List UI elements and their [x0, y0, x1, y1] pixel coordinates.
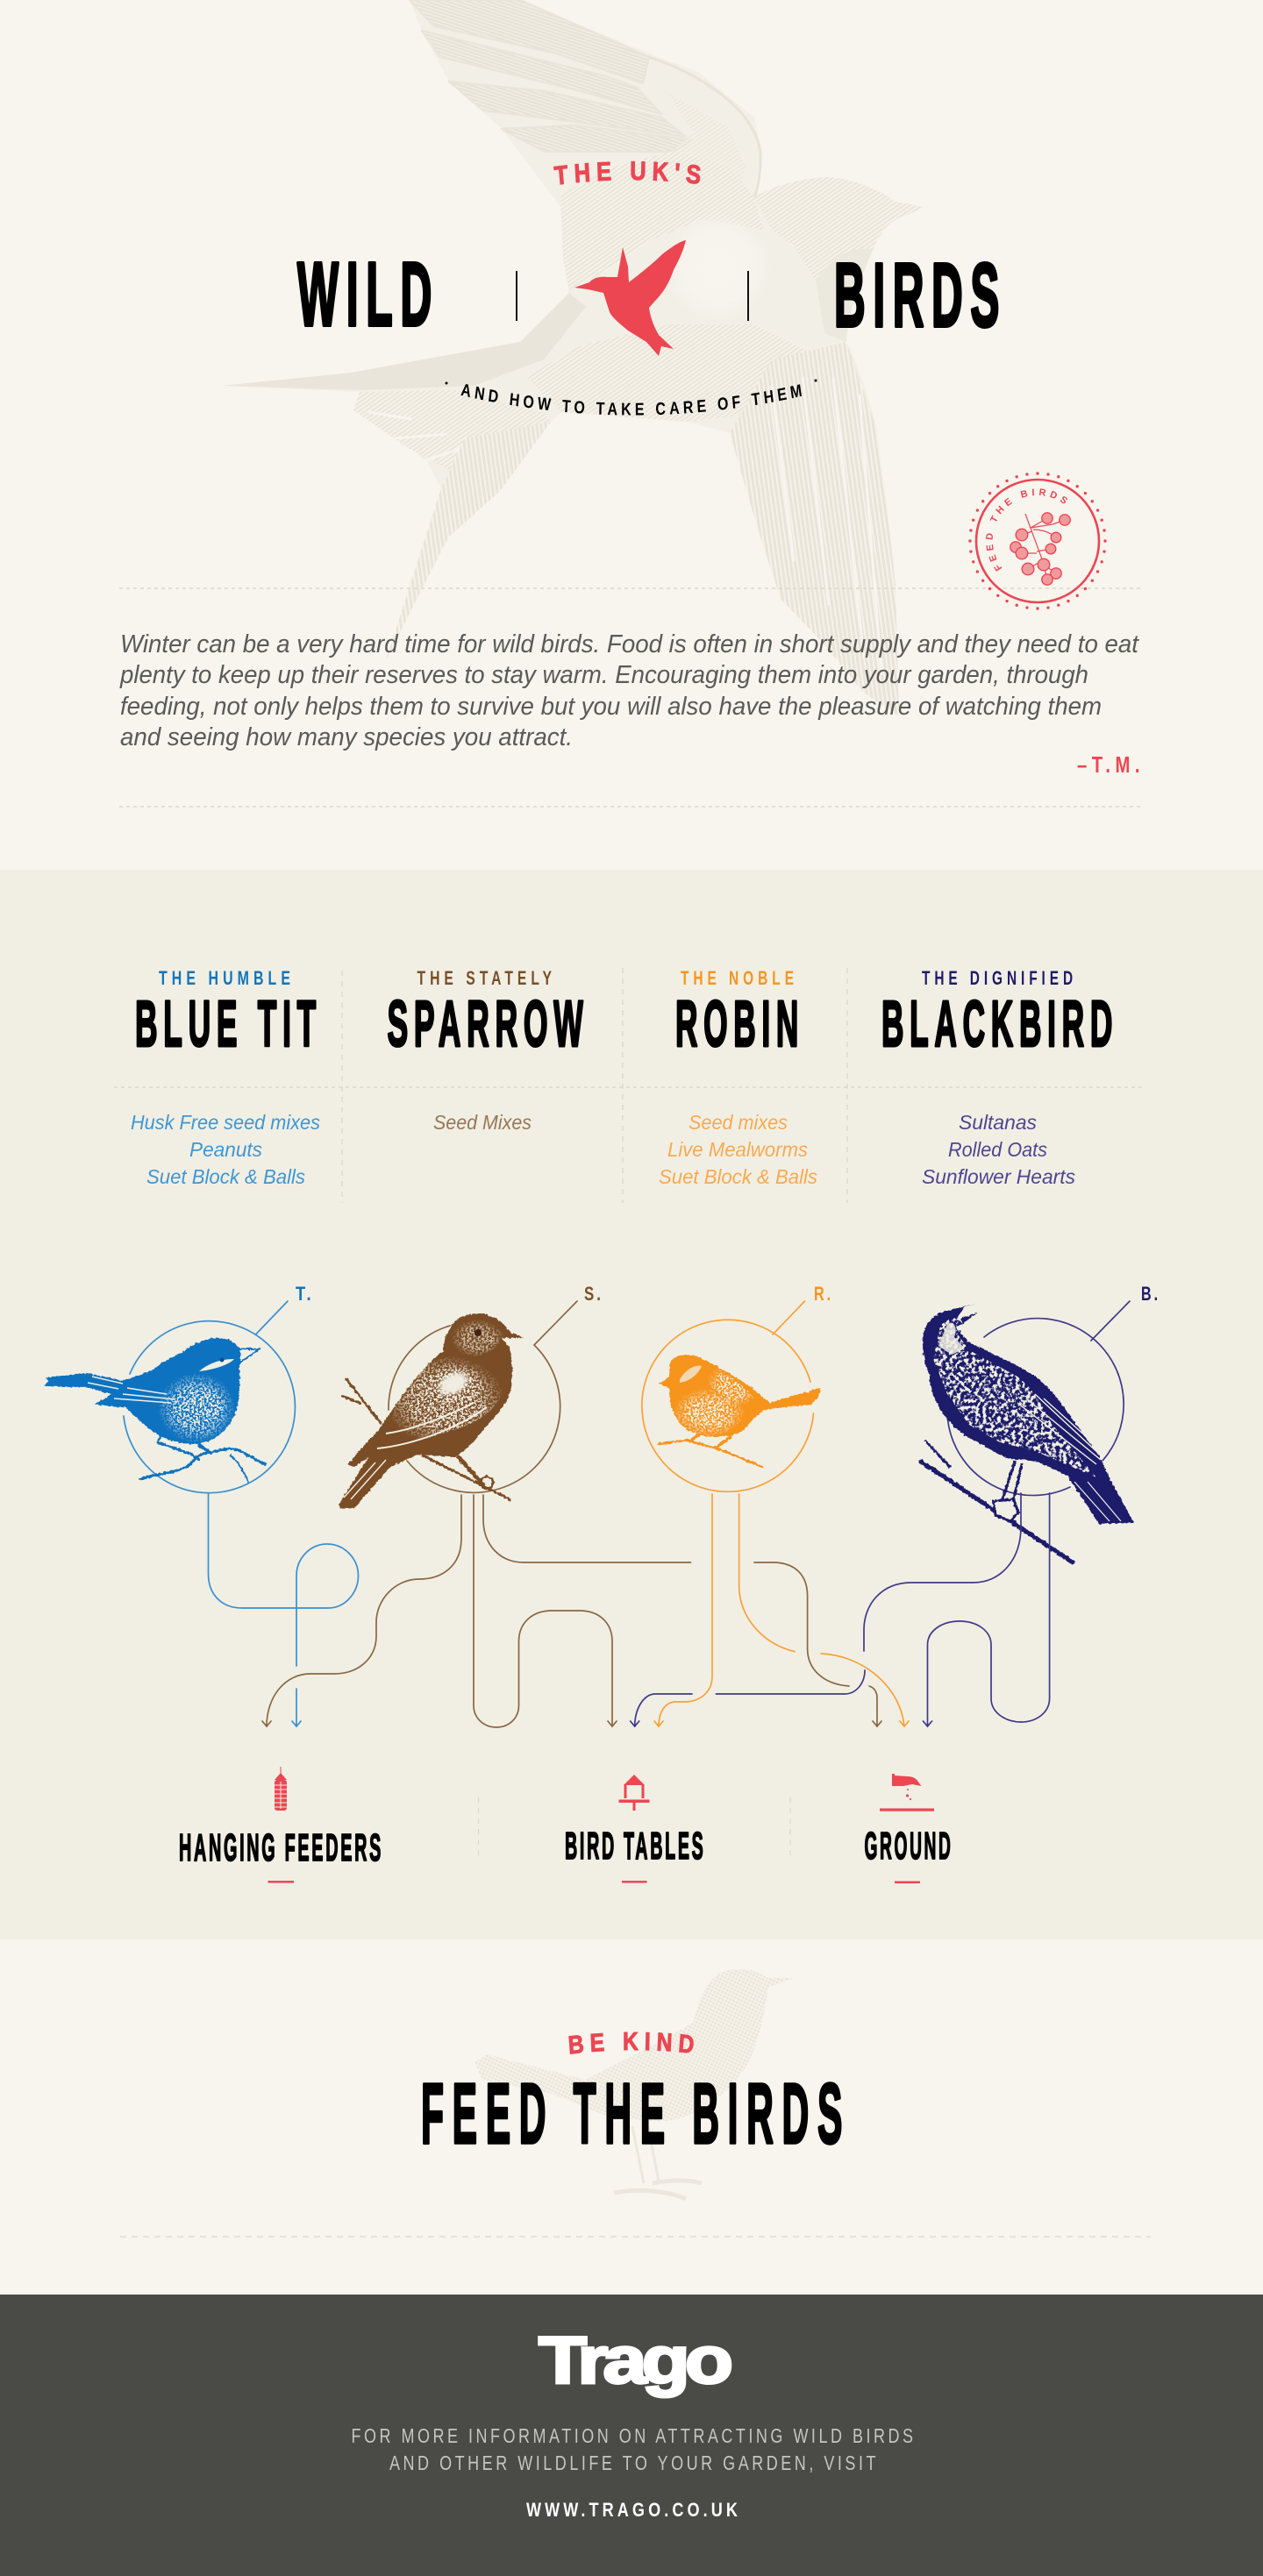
footer text [351, 2424, 916, 2474]
feeding location: ground [865, 1774, 953, 1883]
bird marker: sparrow [389, 1283, 603, 1492]
species column: sparrow: Seed Mixes [433, 1111, 532, 1134]
species column: robin: Seed mixes [689, 1111, 788, 1134]
species column: robin: Suet Block & Balls [659, 1165, 817, 1188]
connector: blue tit routes [209, 1494, 358, 1726]
feeding location: hanging feeders [179, 1767, 383, 1883]
illustration: blackbird [921, 1304, 1134, 1562]
rule below intro [119, 806, 1142, 808]
intro text: feeding, not only helps them to survive but you will also have the pleasure of watching them [120, 693, 1102, 721]
panel: species and feeding guide: BLUE TIT [135, 987, 322, 1060]
feeding location dividers [479, 1797, 790, 1859]
icon: hand scattering seed [880, 1774, 934, 1811]
feeding location: bird tables [565, 1775, 705, 1883]
intro text: plenty to keep up their reserves to stay warm. Encouraging them into your garden, through [119, 661, 1088, 689]
connector: robin to bird tables [654, 1494, 712, 1726]
species column: sparrow [388, 967, 589, 1134]
connector: blackbird to bird tables [631, 1493, 1021, 1726]
panel: hero: BIRDS [834, 245, 1007, 345]
panel: species and feeding guide [0, 870, 1263, 1939]
divider left [516, 271, 517, 321]
icon: red bird logo [574, 240, 686, 356]
connector: blackbird to ground [923, 1493, 1050, 1726]
watermark: small bird [475, 1969, 794, 2199]
illustration: sparrow [339, 1313, 524, 1509]
label: the UK's: THE UK'S [553, 161, 701, 185]
intro text [119, 630, 1140, 751]
species column: blackbird: Sunflower Hearts [922, 1165, 1075, 1188]
species column: sparrow: THE STATELY [417, 967, 556, 989]
connector: sparrow to hanging feeders [262, 1495, 461, 1726]
bird marker: blackbird: B. [1141, 1283, 1160, 1305]
species column: blue tit [131, 967, 322, 1188]
bird marker: blue tit [124, 1283, 314, 1493]
bird marker: blue tit: T. [296, 1283, 314, 1305]
connector: sparrow to bird tables [474, 1495, 617, 1727]
connector: robin to ground [739, 1494, 909, 1726]
species column: robin: Live Mealworms [667, 1138, 808, 1161]
icon: hanging feeder [275, 1767, 287, 1811]
species column: blue tit: Suet Block & Balls [146, 1165, 305, 1188]
species column: blackbird: Sultanas [959, 1111, 1037, 1134]
footer url: WWW.TRAGO.CO.UK [526, 2499, 741, 2521]
stamp: feed the birds [968, 472, 1107, 610]
panel: species and feeding guide: HANGING FEEDERS [179, 1826, 383, 1869]
watermark: swallow [222, 0, 924, 716]
species column: blackbird: Rolled Oats [948, 1138, 1047, 1161]
rule [120, 2236, 1151, 2238]
attribution: –T.M. [1077, 751, 1145, 778]
intro text: Winter can be a very hard time for wild birds. Food is often in short supply and they need to eat [120, 630, 1140, 658]
panel: footer [0, 2295, 1263, 2576]
species column: blue tit: THE HUMBLE [159, 967, 295, 989]
icon: bird table [619, 1775, 649, 1811]
column dividers [342, 968, 847, 1203]
illustration: blue tit [44, 1338, 265, 1482]
bird marker: robin: R. [814, 1283, 833, 1305]
species column: robin: ROBIN [675, 987, 804, 1060]
bird marker: sparrow: S. [584, 1283, 603, 1305]
logo: Trago: Trago [539, 2323, 731, 2398]
intro text: and seeing how many species you attract. [120, 723, 573, 751]
bird marker: blackbird [947, 1283, 1160, 1496]
illustration: robin [659, 1355, 821, 1467]
bird marker: robin [642, 1283, 833, 1491]
species column: blue tit: Peanuts [189, 1138, 262, 1161]
species column: blackbird [881, 967, 1118, 1188]
species column: blue tit: Husk Free seed mixes [131, 1111, 320, 1134]
subtitle arc: AND HOW TO TAKE CARE OF THEM [460, 384, 802, 416]
species column: blackbird: THE DIGNIFIED [922, 967, 1077, 989]
subtitle dot left [446, 382, 447, 384]
panel: call to action [120, 1969, 1151, 2238]
panel: species and feeding guide: SPARROW [388, 987, 589, 1060]
connector: sparrow to ground [483, 1495, 881, 1726]
rule above intro [119, 587, 1142, 589]
subtitle dot right [814, 379, 817, 382]
footer text: FOR MORE INFORMATION ON ATTRACTING WILD BIRDS [351, 2424, 916, 2447]
panel: species and feeding guide: BIRD TABLES [565, 1825, 705, 1868]
panel: species and feeding guide: GROUND [865, 1825, 953, 1868]
panel: hero: WILD [297, 244, 439, 345]
label: be kind: BE KIND [568, 2032, 694, 2054]
stamp: feed the birds: FEED THE BIRDS [986, 488, 1067, 572]
divider right [747, 271, 749, 321]
panel: hero [119, 0, 1145, 808]
horizontal rule [114, 1086, 1144, 1088]
species column: robin: THE NOBLE [681, 967, 798, 989]
footer text: AND OTHER WILDLIFE TO YOUR GARDEN, VISIT [389, 2451, 879, 2474]
species column: robin [659, 967, 817, 1188]
